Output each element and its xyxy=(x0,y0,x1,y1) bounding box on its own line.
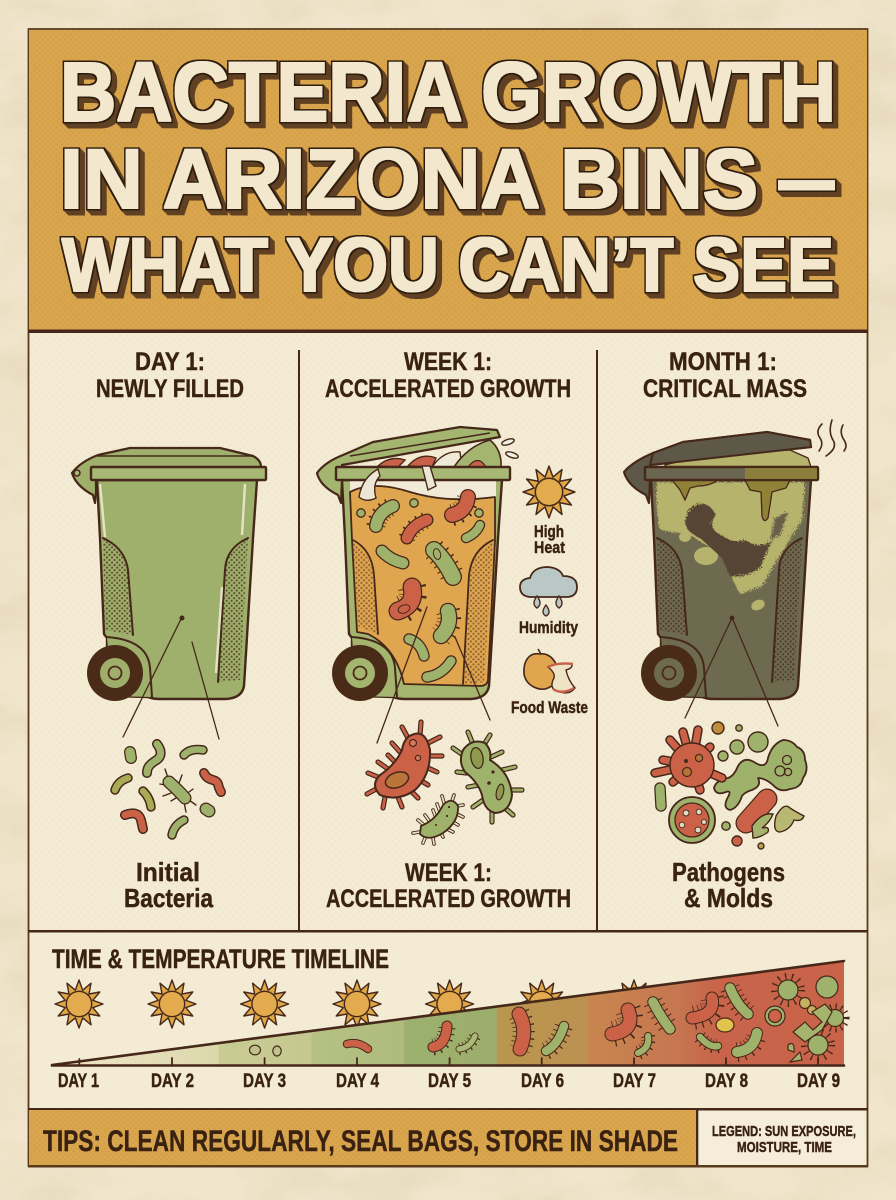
heading: week 1: WEEK 1: xyxy=(404,348,492,376)
panel: tips footer xyxy=(28,1108,868,1168)
panel: week 1 column xyxy=(317,348,571,913)
rim xyxy=(336,467,510,480)
label: pathogens and molds: Pathogens xyxy=(672,857,785,887)
label: pathogens and molds xyxy=(672,857,785,913)
panel: header banner xyxy=(28,30,868,333)
legend box: MOISTURE, TIME xyxy=(737,1139,832,1156)
lid highlight xyxy=(350,433,490,456)
label: food waste: Food Waste xyxy=(511,698,588,717)
bin contents: orange liquid xyxy=(350,480,496,686)
rim xyxy=(645,467,818,480)
timeline heading: TIME & TEMPERATURE TIMELINE xyxy=(52,944,389,974)
tilted dark lid xyxy=(624,432,811,503)
enlarged bacteria xyxy=(367,722,522,844)
day labels: DAY 1 xyxy=(58,1071,99,1092)
bacteria inside bin xyxy=(357,497,483,677)
hanging bags xyxy=(359,469,380,500)
overflowing waste xyxy=(665,450,811,467)
label: week 1 xyxy=(326,859,571,913)
initial bacteria cluster xyxy=(115,744,221,835)
garbage xyxy=(378,440,501,467)
red capsule xyxy=(746,799,767,823)
splash drops xyxy=(501,438,519,459)
label: week 1: ACCELERATED GROWTH xyxy=(326,885,571,913)
day labels: DAY 4 xyxy=(336,1071,379,1092)
label: high heat: High xyxy=(534,522,564,541)
day labels: DAY 8 xyxy=(705,1071,748,1092)
day labels: DAY 9 xyxy=(797,1071,840,1092)
scraps xyxy=(752,806,804,838)
hanging bag 2 xyxy=(422,466,436,490)
day labels: DAY 6 xyxy=(521,1071,564,1092)
title: BACTERIA GROWTH xyxy=(60,45,836,139)
label: pathogens and molds: & Molds xyxy=(684,883,773,913)
slime drips xyxy=(672,480,790,521)
pathogens and molds cluster xyxy=(655,722,807,849)
pointer lines xyxy=(377,607,490,743)
day labels: DAY 7 xyxy=(613,1071,656,1092)
icon group: conditions xyxy=(511,466,588,717)
day 9 cluster xyxy=(765,976,846,1062)
mold patches xyxy=(656,482,805,612)
spores xyxy=(712,722,768,849)
panel: middle stage area xyxy=(28,333,868,932)
bin: moldy dark bin xyxy=(624,432,818,701)
panel: timeline xyxy=(52,944,846,1092)
title: IN ARIZONA BINS xyxy=(60,132,758,226)
icon: sun high heat xyxy=(523,466,575,518)
label: initial bacteria: Initial xyxy=(136,857,200,887)
bin: filled bin xyxy=(317,427,519,701)
red bacterium xyxy=(367,722,442,808)
heading: month 1: CRITICAL MASS xyxy=(643,375,807,403)
pointer lines xyxy=(685,616,778,726)
lid front xyxy=(650,432,811,465)
amoeba xyxy=(714,740,807,810)
legend box xyxy=(698,1110,866,1165)
sun row xyxy=(55,980,658,1028)
label: high heat: Heat xyxy=(534,538,565,557)
day labels: DAY 3 xyxy=(243,1071,286,1092)
bin: clean green bin xyxy=(72,448,266,701)
heading: month 1 xyxy=(643,348,807,403)
steam xyxy=(818,420,846,456)
tilted lid xyxy=(317,427,500,503)
icon: food waste apple xyxy=(524,649,575,693)
title: — xyxy=(779,132,834,226)
small green bacterium xyxy=(413,795,463,844)
heading: day 1 xyxy=(96,348,244,403)
panel: day 1 column xyxy=(72,348,266,913)
icon: rain cloud humidity xyxy=(520,567,577,616)
timeline bacteria xyxy=(250,976,846,1062)
title xyxy=(60,45,836,308)
heading: day 1: NEWLY FILLED xyxy=(96,375,244,403)
title: WHAT YOU CAN’T SEE xyxy=(62,223,834,308)
growth wedge xyxy=(52,961,844,1066)
label: humidity: Humidity xyxy=(519,618,578,637)
tips text: TIPS: CLEAN REGULARLY, SEAL BAGS, STORE IN SHADE xyxy=(43,1125,678,1158)
heading: week 1 xyxy=(325,348,571,403)
green capsule xyxy=(660,788,661,806)
day labels: DAY 5 xyxy=(428,1071,471,1092)
day labels xyxy=(58,1071,840,1092)
label: initial bacteria: Bacteria xyxy=(124,883,213,913)
heading: week 1: ACCELERATED GROWTH xyxy=(325,375,571,403)
day labels: DAY 2 xyxy=(151,1071,194,1092)
round cell xyxy=(669,797,715,843)
label: high heat xyxy=(534,522,565,557)
label: week 1: WEEK 1: xyxy=(405,859,492,887)
pointer lines xyxy=(123,616,219,739)
heading: day 1: DAY 1: xyxy=(135,348,205,376)
label: initial bacteria xyxy=(124,857,213,913)
panel: month 1 column xyxy=(624,348,846,913)
green bacterium xyxy=(453,732,522,822)
heading: month 1: MONTH 1: xyxy=(669,348,777,376)
spiked red virus xyxy=(655,730,722,790)
